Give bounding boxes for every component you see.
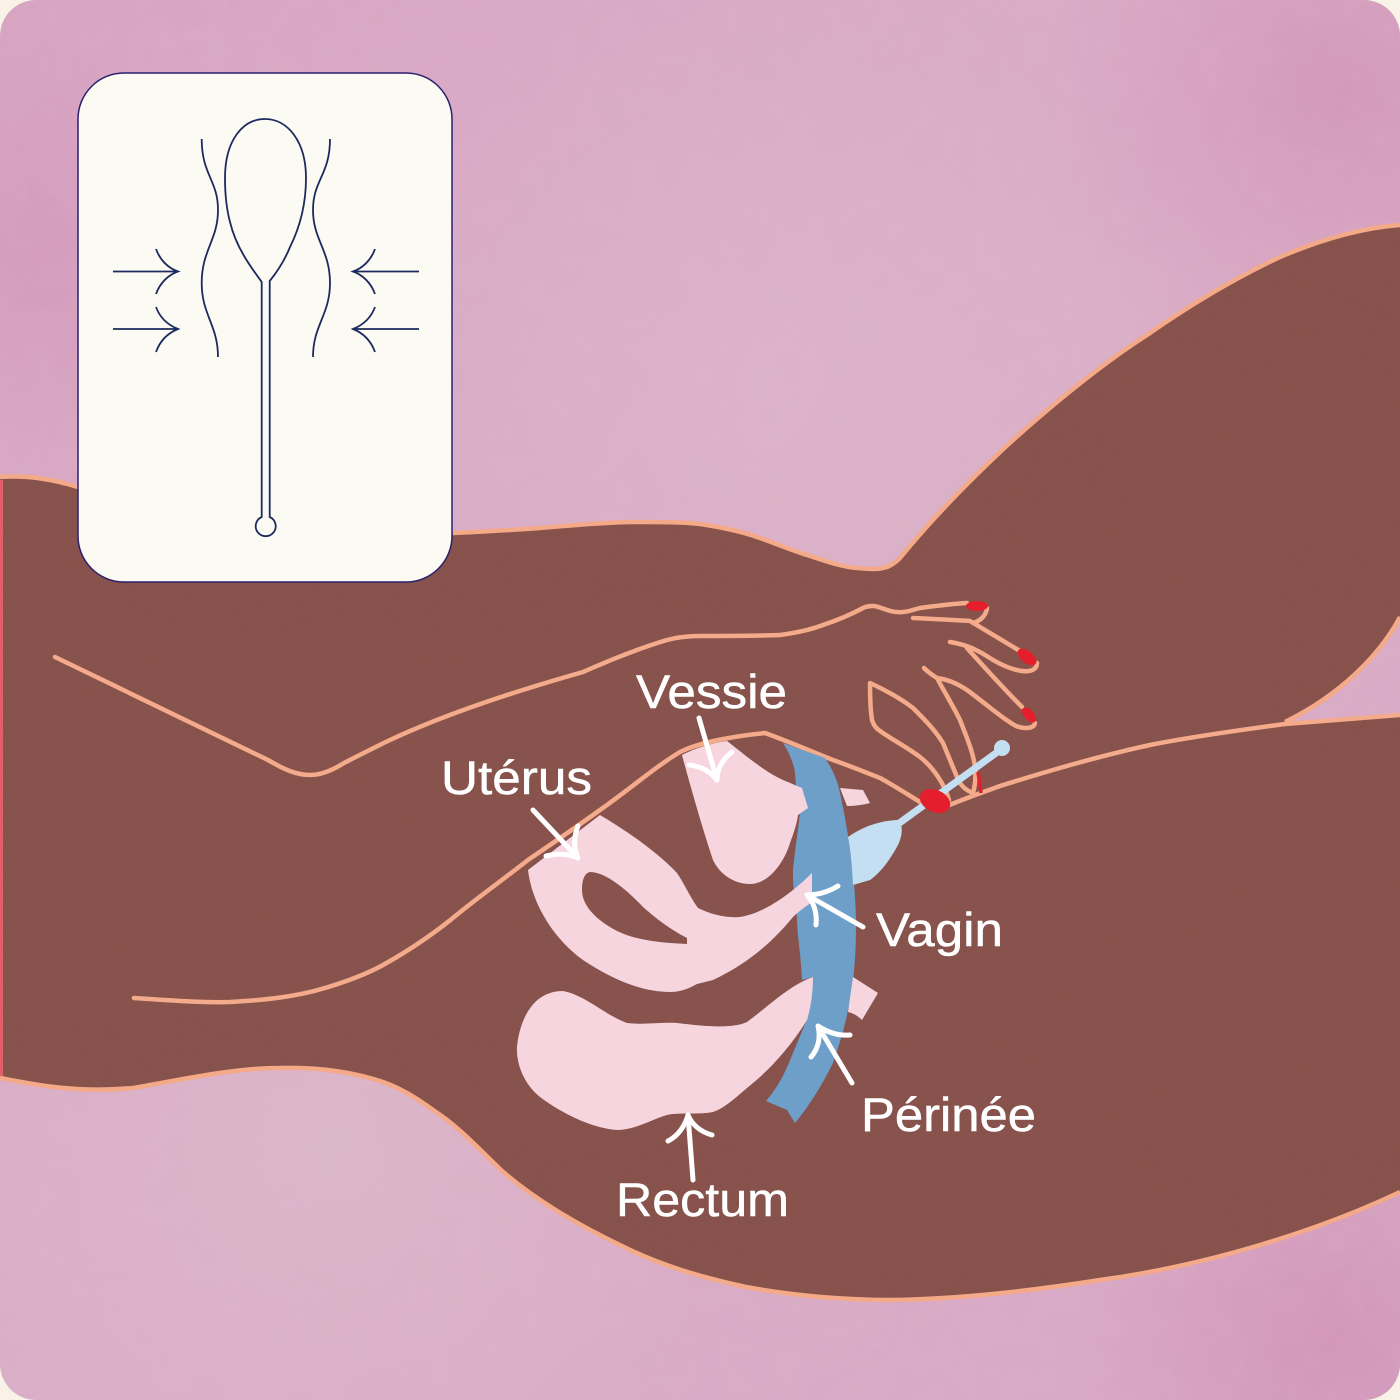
red fingernails — [916, 601, 1039, 818]
thigh outline — [935, 715, 1400, 811]
uterus — [528, 815, 812, 992]
vulva outline — [134, 733, 925, 1002]
panel: pelvic contraction diagram card — [78, 73, 452, 582]
arm outline — [55, 603, 967, 775]
menstrual cup device — [848, 740, 1010, 885]
label: Utérus: Utérus — [441, 751, 592, 804]
icon: cup with stem — [225, 119, 306, 536]
hand fingers — [870, 608, 1037, 800]
anal canal — [848, 977, 878, 1020]
label: Vagin — [807, 886, 1003, 956]
rectum — [517, 977, 813, 1130]
label: Périnée — [811, 1026, 1036, 1141]
label: Périnée: Périnée — [861, 1088, 1036, 1141]
bladder — [682, 741, 808, 884]
label: Rectum — [616, 1115, 789, 1226]
urethra — [840, 788, 870, 806]
label: Vessie: Vessie — [636, 665, 787, 718]
vaginal wall curves — [202, 139, 330, 357]
body silhouette — [0, 222, 1400, 1302]
perineum muscle — [766, 743, 856, 1123]
label: Vagin: Vagin — [876, 903, 1003, 956]
label: Vessie — [636, 665, 787, 780]
arrows pressing inward — [113, 249, 419, 352]
label: Utérus — [441, 751, 592, 858]
label: Rectum: Rectum — [616, 1173, 789, 1226]
